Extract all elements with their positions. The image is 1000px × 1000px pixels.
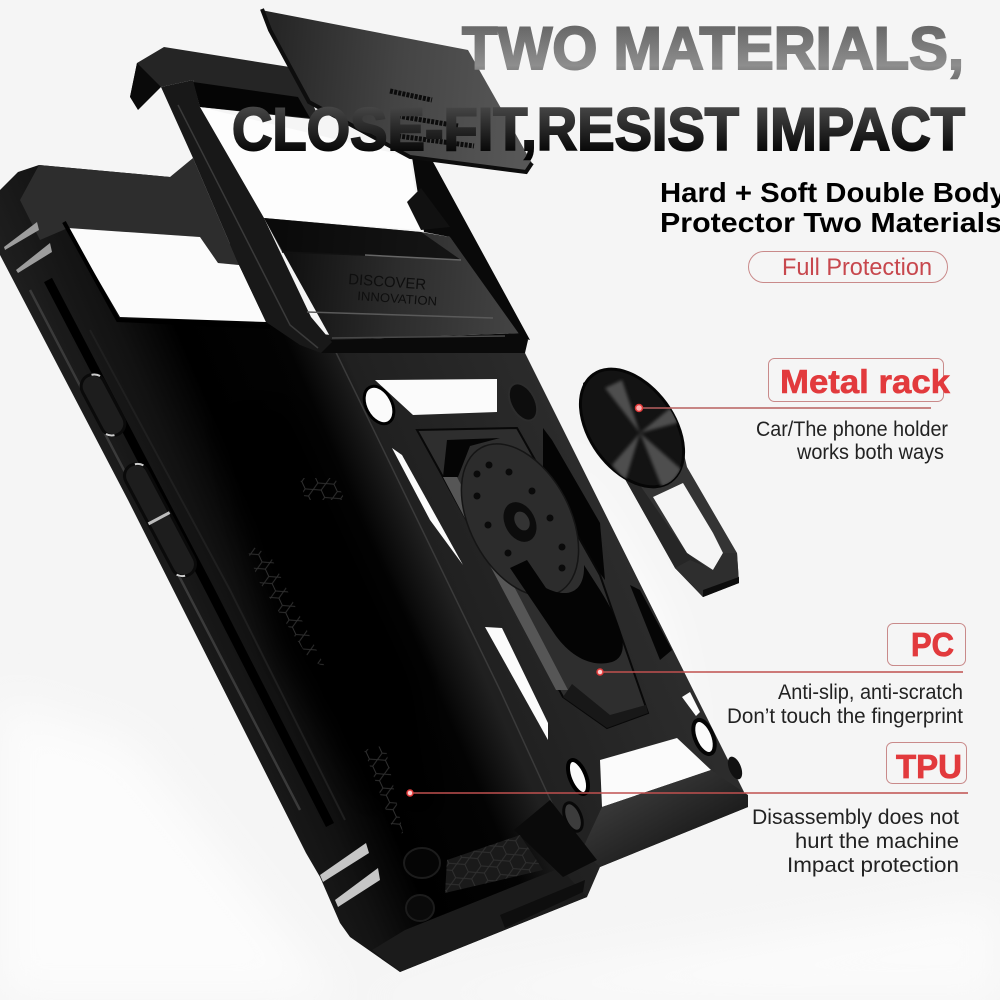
ring left arm shade	[603, 440, 710, 597]
leader line	[639, 407, 931, 409]
title line two: CLOSE-FIT,RESIST IMPACT	[232, 96, 965, 163]
plate inner wedge	[443, 438, 500, 477]
plate base chevron	[563, 684, 648, 728]
dial screw	[497, 496, 543, 548]
slider edge	[262, 9, 532, 172]
leader dot	[597, 669, 603, 675]
phone case back	[0, 9, 748, 972]
right frame arm	[412, 157, 530, 340]
left side rail	[30, 280, 345, 825]
bottom bumper silver strips	[320, 843, 380, 907]
embossed label: DISCOVER	[348, 271, 427, 293]
left mount hole	[358, 381, 400, 429]
top window of back plate	[375, 379, 497, 415]
inner channel of upper frame	[193, 82, 310, 118]
lower camera window	[68, 228, 266, 322]
callout: PC	[597, 624, 966, 728]
slider dark top band	[264, 218, 461, 260]
dial dots	[474, 462, 566, 572]
callout: metal rack	[636, 358, 951, 464]
hex grip bottom mesh	[445, 835, 543, 893]
subtitle	[660, 177, 1000, 238]
dial screw head	[511, 509, 533, 533]
right body seam	[330, 340, 555, 810]
full protection pill: Full Protection	[782, 254, 932, 281]
side button lower	[120, 460, 200, 580]
TPU description: Impact protection	[787, 854, 959, 877]
top bumper silver strips	[4, 222, 52, 273]
left frame arm	[161, 80, 332, 353]
bottom left hole	[564, 757, 592, 797]
lower port detail	[500, 880, 585, 928]
callout: TPU	[407, 742, 968, 877]
corner hole right	[725, 755, 745, 781]
right mount hole	[503, 379, 543, 425]
lower button separator	[148, 513, 170, 524]
right arm tab	[407, 188, 450, 230]
callout: TPU: TPU	[896, 748, 962, 785]
lower button glint	[122, 461, 198, 579]
title line one: TWO MATERIALS,	[462, 15, 964, 82]
small white notch	[682, 692, 700, 716]
slider grip ridges	[390, 91, 474, 146]
hex grip bottom	[445, 835, 543, 893]
subtitle: Protector Two Materials	[660, 207, 1000, 238]
metal rack description: works both ways	[796, 441, 944, 464]
bottom right hole	[689, 717, 719, 757]
lower plate field	[372, 868, 587, 972]
upper frame corner	[130, 63, 161, 110]
embossed label: INNOVATION	[357, 289, 438, 309]
hex grip middle	[364, 745, 403, 835]
white side slot lower	[485, 627, 548, 740]
callout: PC: PC	[911, 626, 954, 663]
bottom window	[600, 738, 711, 807]
ring outer	[583, 370, 739, 597]
metal rack description: Car/The phone holder	[756, 418, 948, 441]
slider outer frame	[310, 225, 528, 353]
corner bumper	[514, 800, 597, 877]
bevel strip	[443, 477, 568, 690]
kickstand plate	[417, 424, 648, 728]
bottom button 2	[406, 895, 434, 921]
ring holder	[578, 368, 739, 597]
side button upper	[77, 370, 129, 440]
dial	[437, 424, 603, 616]
callout: metal rack: Metal rack	[780, 363, 951, 400]
leader dot	[636, 404, 642, 412]
plate outer	[417, 428, 648, 728]
upper button glint	[78, 372, 128, 438]
window rim	[64, 222, 270, 327]
black slide slot	[510, 560, 623, 663]
PC description	[727, 681, 963, 728]
slider highlight lines	[282, 252, 505, 338]
leader dot	[407, 790, 413, 796]
metal rack description	[756, 418, 948, 464]
PC description: Anti-slip, anti-scratch	[778, 681, 963, 704]
white side slot upper	[392, 448, 463, 565]
arm highlight	[178, 105, 318, 348]
bottom buttons	[404, 848, 440, 878]
TPU description	[752, 806, 959, 877]
PC label	[888, 624, 966, 666]
slider base on case	[264, 218, 521, 340]
PC description: Don’t touch the fingerprint	[727, 705, 963, 728]
disc sheen	[604, 380, 681, 486]
upper camera window	[200, 107, 421, 230]
TPU label	[886, 742, 966, 784]
metal rack label	[768, 358, 944, 402]
bottom band	[582, 770, 748, 867]
subtitle: Hard + Soft Double Body	[660, 177, 1000, 208]
body shadow	[215, 400, 440, 820]
ring disc	[559, 350, 705, 506]
upper frame band	[130, 47, 320, 120]
leader line	[410, 792, 968, 794]
top band of lower case	[20, 158, 239, 265]
black side slot right lower	[630, 585, 672, 660]
case body	[0, 165, 748, 972]
leader line	[600, 671, 963, 673]
embossed label	[348, 271, 438, 309]
full protection pill	[748, 252, 948, 282]
black side slot right	[543, 428, 605, 580]
top slider cover	[261, 9, 532, 172]
corner screw hole	[560, 800, 586, 834]
ring foot shadow	[703, 577, 739, 597]
hex grip top	[300, 478, 345, 500]
ring foot	[675, 553, 739, 597]
TPU description: Disassembly does not	[752, 806, 959, 829]
hex grip upper	[245, 543, 325, 667]
TPU description: hurt the machine	[795, 830, 959, 853]
